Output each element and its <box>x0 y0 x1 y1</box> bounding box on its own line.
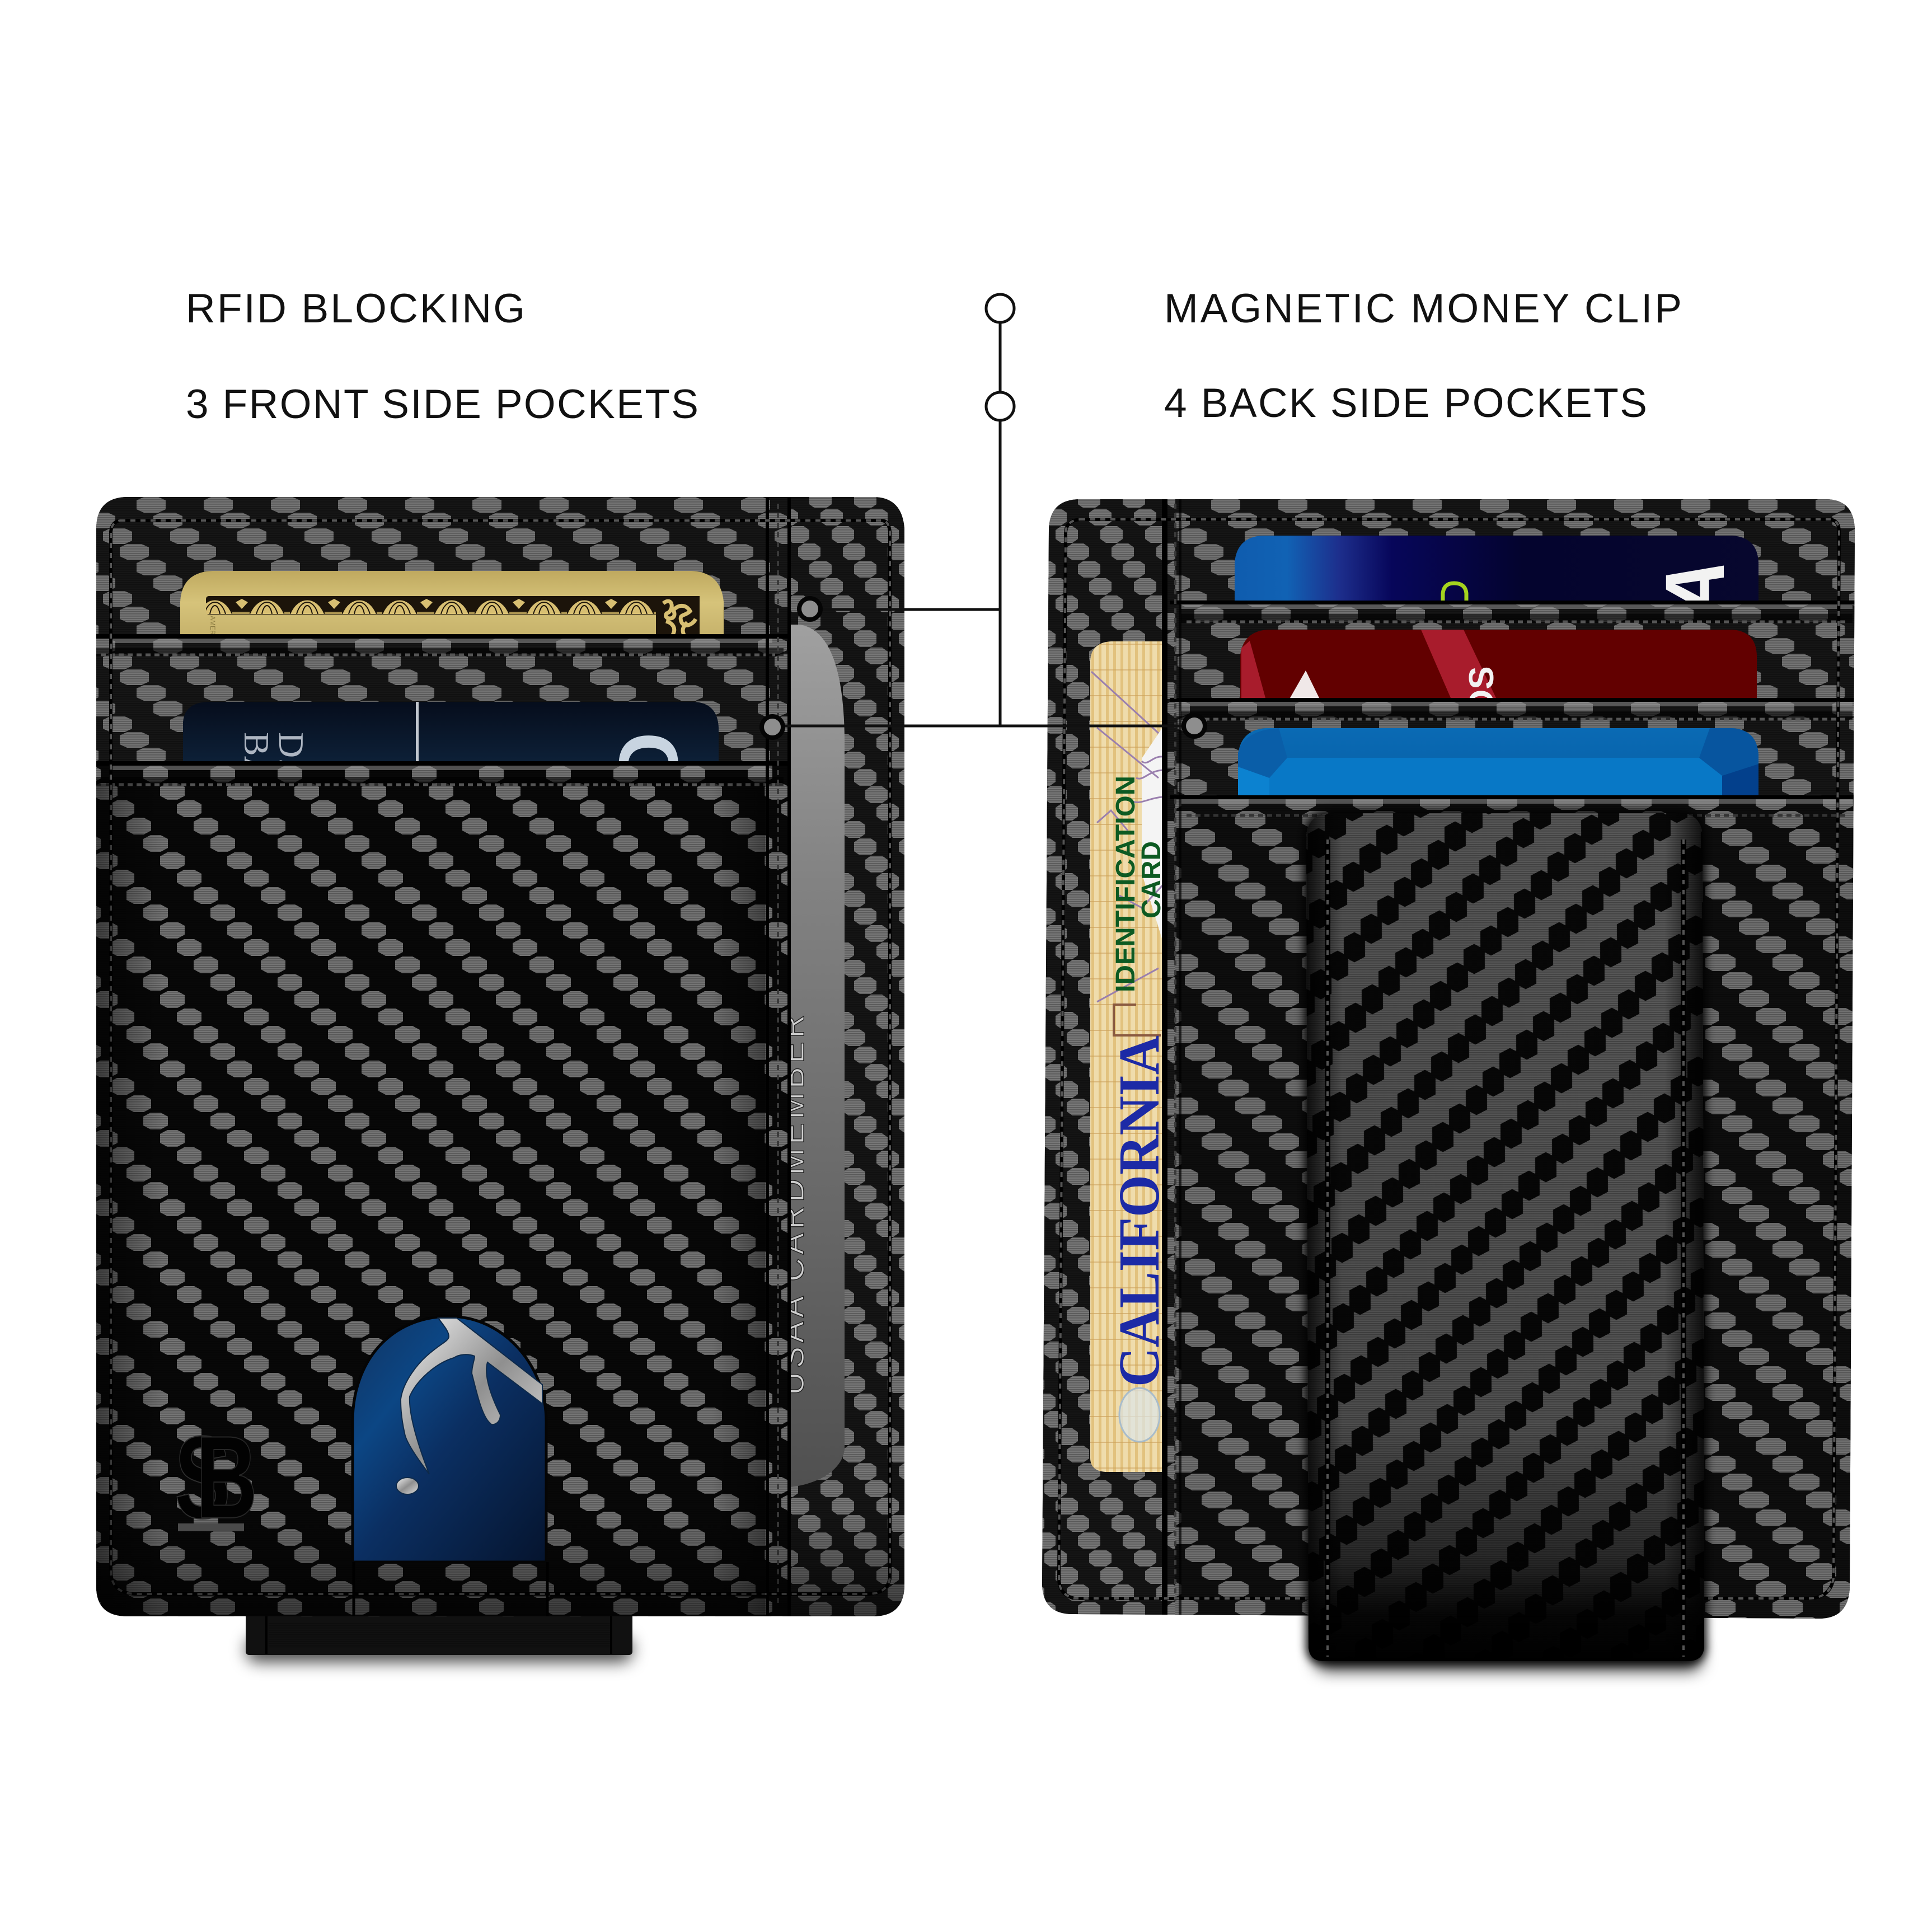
clip stitch highlights <box>1328 840 1684 1657</box>
clip side fade <box>1306 813 1704 1661</box>
ID card map <box>1091 672 1171 1442</box>
wallet textures: left <box>92 493 912 1623</box>
top and side stitching <box>111 520 890 1594</box>
card: red <box>1240 630 1757 716</box>
facet left upper <box>1238 728 1287 778</box>
ID card seal <box>1119 1388 1160 1442</box>
thumb notch: blue <box>353 1316 547 1616</box>
navy card stripe <box>416 702 419 761</box>
brand logo embossed: S <box>175 1412 231 1543</box>
money clip tail: left <box>246 1606 632 1655</box>
gold card ornament <box>656 596 700 635</box>
gold card small text: AMER <box>209 616 217 635</box>
gold card <box>180 571 724 635</box>
rivet: left wallet upper <box>797 596 823 622</box>
left wallet (front view) <box>92 493 912 1662</box>
gold card guilloche band <box>206 596 700 615</box>
clip stitching <box>1328 840 1684 1657</box>
callout marker: second <box>986 392 1014 420</box>
facet right upper <box>1699 728 1759 776</box>
card: blue facets <box>1238 728 1759 795</box>
facet right lower <box>1722 764 1759 795</box>
pocket edge band: lower <box>92 761 789 786</box>
red card letters: OS <box>1462 666 1501 716</box>
red card left wedge <box>1241 641 1265 698</box>
vertical seam: right <box>1162 493 1181 1623</box>
ID card <box>1090 641 1171 1472</box>
brand logo embossed: B <box>196 1412 257 1543</box>
notch flap seams <box>354 1562 547 1616</box>
callout connector lines <box>772 323 1194 726</box>
wallet textures: right <box>1041 493 1864 1624</box>
card: navy and blue <box>1235 536 1759 622</box>
navy card letters <box>245 733 678 761</box>
callout marker: top <box>986 294 1014 322</box>
ID card map: CARD <box>1137 841 1166 918</box>
rivet: left wallet lower <box>759 714 785 740</box>
title: RFID blocking: RFID BLOCKING <box>186 286 525 331</box>
navy card letters: BA <box>237 732 276 782</box>
outer stitching: right <box>1059 519 1839 1598</box>
clip vertical fade <box>1298 813 1713 1661</box>
pocket edge band: upper <box>92 634 789 656</box>
steel card <box>789 625 845 1487</box>
steel card text: USAA CARDMEMBER <box>775 1015 811 1395</box>
ID card map: IDENTIFICATION <box>1111 776 1141 992</box>
logo highlight <box>178 1523 244 1531</box>
card letter C <box>1443 583 1466 601</box>
stitch highlights <box>111 520 890 1594</box>
navy card <box>183 702 719 761</box>
antler drop <box>396 1478 419 1494</box>
title: 3 front side pockets: 3 FRONT SIDE POCKETS <box>186 382 698 427</box>
red card white mark <box>1290 670 1319 698</box>
magnetic money clip <box>1298 806 1713 1668</box>
outer stitch highlights: right <box>1059 519 1839 1598</box>
navy card letters: C <box>602 732 696 793</box>
vertical seam <box>766 493 791 1623</box>
pocket bands: right <box>1170 601 1864 815</box>
side shading <box>96 784 765 1623</box>
shadow under left wallet <box>246 1637 632 1662</box>
wallet body: left <box>96 497 904 1616</box>
facet centre <box>1269 758 1722 795</box>
clip fine lines <box>1298 806 1713 1668</box>
wallet body: right <box>1042 499 1855 1619</box>
red card stripe <box>1421 630 1496 698</box>
rivet: right wallet <box>1181 713 1207 739</box>
facet left lower <box>1238 767 1269 795</box>
ID card map: CALIFORNIA <box>1107 1035 1171 1387</box>
antler logo <box>401 1318 542 1474</box>
navy card letters: D. <box>271 732 311 767</box>
lower shading <box>96 1511 908 1617</box>
title: magnetic money clip: MAGNETIC MONEY CLIP <box>1164 286 1682 331</box>
ID state outline <box>1114 1005 1161 1035</box>
clip surface <box>1298 806 1713 1668</box>
title: 4 back side pockets: 4 BACK SIDE POCKETS <box>1164 381 1647 426</box>
clip shadow <box>1315 1645 1701 1671</box>
right wallet (back view) <box>1041 493 1864 1671</box>
card letter A: A <box>1648 560 1742 622</box>
